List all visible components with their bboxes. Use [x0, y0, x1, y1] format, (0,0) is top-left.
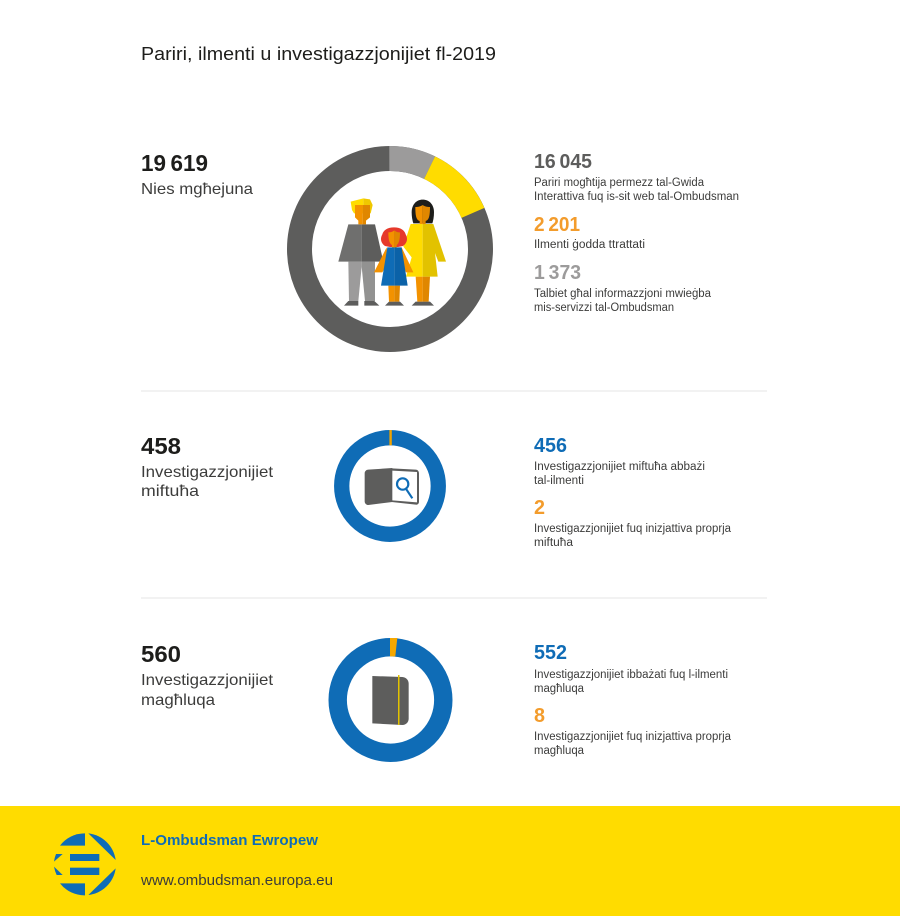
- stat: 2: [534, 497, 732, 549]
- icon: family: [338, 198, 446, 306]
- father: [338, 198, 383, 306]
- stat: 16 045: [534, 151, 739, 203]
- stat: 16 045: Pariri mogħtija permezz tal-Gwida: [534, 177, 705, 189]
- heading: 560 closed: Investigazzjonijiet: [141, 672, 274, 689]
- footer band: [0, 806, 900, 916]
- stat: 1 373: mis-servizzi tal-Ombudsman: [534, 302, 674, 314]
- stat: 8: 8: [534, 705, 545, 727]
- stat: 8: [534, 705, 732, 757]
- heading: 19 619 people: [141, 150, 253, 198]
- stat: 456: 456: [534, 435, 567, 457]
- heading: 458 opened: Investigazzjonijiet: [141, 464, 274, 481]
- heading: 458 opened: 458: [141, 433, 181, 459]
- panel: inquiries opened: [141, 430, 732, 549]
- donut chart: people: [300, 158, 480, 340]
- stat: 8: magħluqa: [534, 745, 585, 757]
- icon: European Ombudsman logo: [54, 833, 116, 895]
- stat: 456: Investigazzjonijiet miftuħa abbażi: [534, 461, 705, 473]
- stat: 2: Investigazzjonijiet fuq inizjattiva proprja: [534, 523, 732, 535]
- heading: 19 619 people: Nies mgħejuna: [141, 181, 253, 198]
- panel: inquiries closed: [141, 638, 732, 757]
- stat: 552: [534, 642, 728, 695]
- girl: [374, 227, 413, 306]
- stat: 456: tal-ilmenti: [534, 475, 584, 487]
- icon: closed book: [372, 675, 409, 725]
- stat: 2: 2: [534, 497, 545, 519]
- heading: 560 closed: [141, 641, 274, 709]
- mother: [403, 200, 446, 306]
- stat: 16 045: 16 045: [534, 151, 592, 173]
- heading: 19 619 people: 19 619: [141, 150, 208, 176]
- stat: 1 373: 1 373: [534, 262, 581, 284]
- heading: 458 opened: miftuħa: [141, 483, 199, 500]
- donut chart: closed: [338, 638, 443, 753]
- stat: 2 201: Ilmenti ġodda ttrattati: [534, 239, 645, 251]
- footer url: www.ombudsman.europa.eu: [140, 872, 333, 889]
- footer title: L-Ombudsman Ewropew: [141, 832, 318, 849]
- stat: 552: magħluqa: [534, 683, 585, 695]
- heading: 458 opened: [141, 433, 274, 500]
- stat: 2: miftuħa: [534, 537, 574, 549]
- stat: 16 045: Interattiva fuq is-sit web tal-Ombudsman: [534, 191, 739, 203]
- stat: 1 373: [534, 262, 712, 314]
- stat: 552: 552: [534, 642, 567, 664]
- stat: 8: Investigazzjonijiet fuq inizjattiva proprja: [534, 731, 732, 743]
- stat: 1 373: Talbiet għal informazzjoni mwieġba: [534, 288, 712, 300]
- heading: 560 closed: magħluqa: [141, 692, 215, 709]
- stat: 456: [534, 435, 705, 487]
- stat: 552: Investigazzjonijiet ibbażati fuq l-ilmenti: [534, 669, 728, 681]
- title: Pariri, ilmenti u investigazzjonijiet fl-2019: [141, 43, 496, 64]
- stat: 2 201: [534, 214, 645, 251]
- panel: people reached: [141, 150, 739, 340]
- icon: open book with magnifier: [365, 468, 419, 505]
- stat: 2 201: 2 201: [534, 214, 580, 236]
- heading: 560 closed: 560: [141, 641, 181, 667]
- donut chart: opened: [342, 430, 438, 534]
